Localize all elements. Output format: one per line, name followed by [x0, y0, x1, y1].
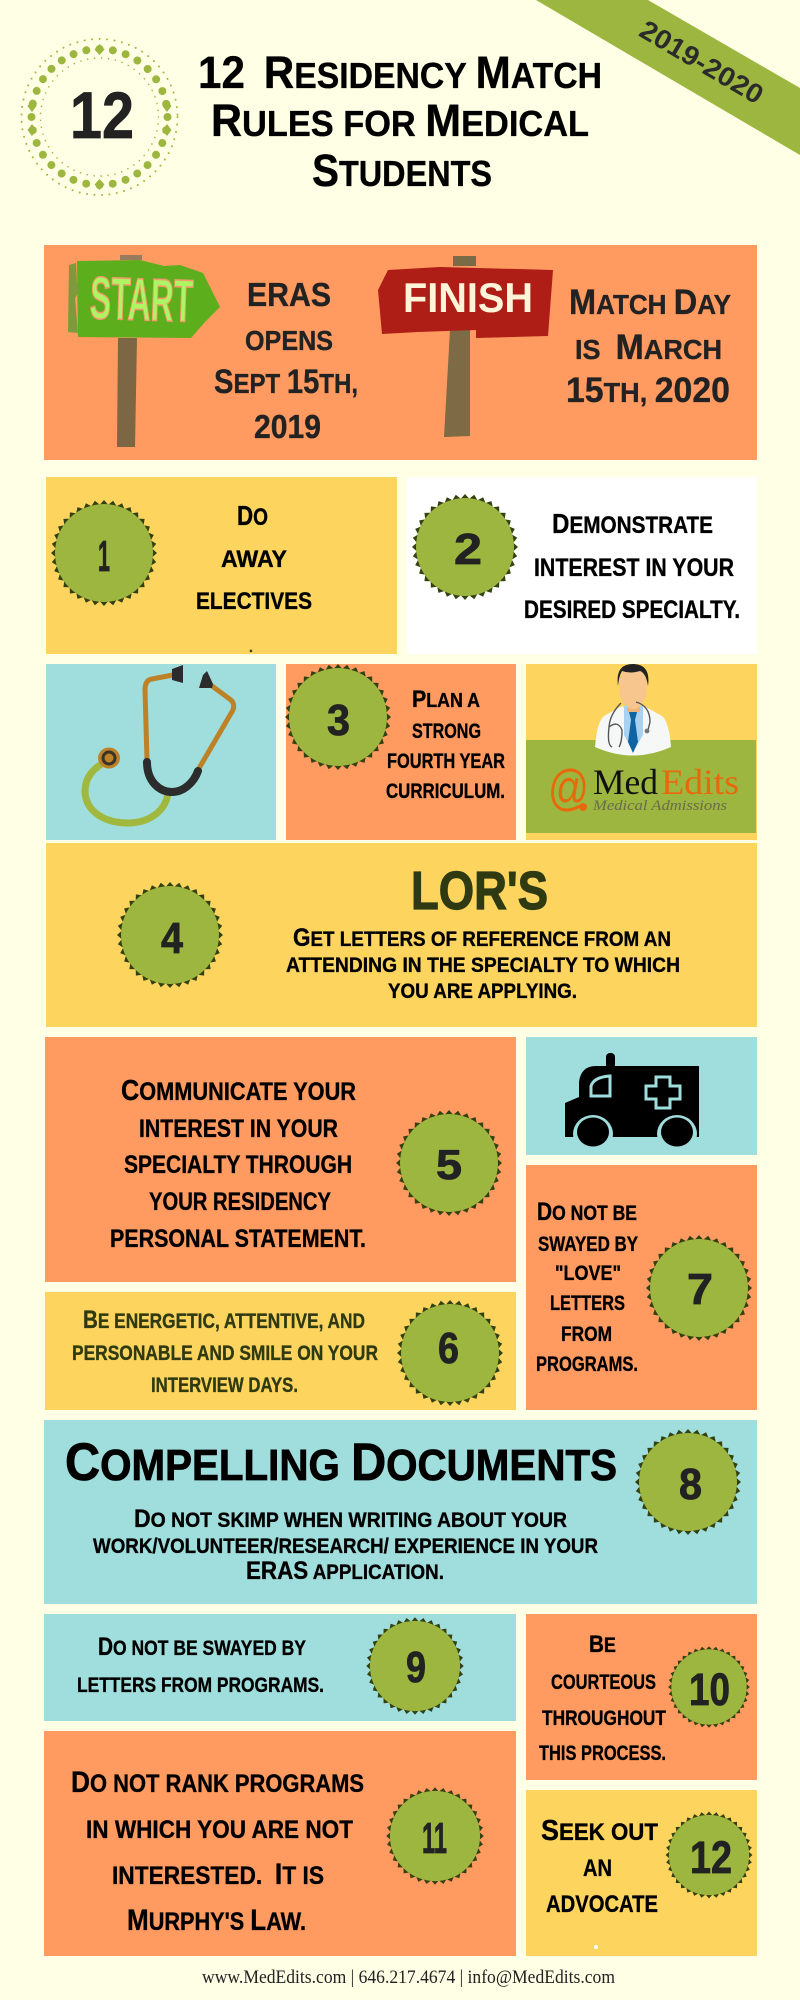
badge 4 — [117, 882, 223, 988]
logo: MedEdits: Med — [593, 762, 658, 802]
badge 6: 6 — [438, 1324, 459, 1373]
panel: rule 5 — [45, 1037, 516, 1282]
text: rule 7: SWAYED BY — [538, 1233, 638, 1256]
panel: stethoscope illustration — [46, 664, 276, 840]
panel: rule 12 — [526, 1790, 757, 1956]
panel: rule 4 LORs — [46, 843, 757, 1027]
panel: rule 7 — [526, 1165, 757, 1410]
text: rule 10 — [539, 1631, 666, 1765]
text: rule 8: WORK/VOLUNTEER/RESEARCH/ EXPERIENCE IN YOUR — [93, 1535, 598, 1558]
icon: doctor — [595, 664, 671, 756]
text: rule 7 — [536, 1198, 638, 1376]
text: rule 2 — [524, 508, 740, 624]
text: rule 5: COMMUNICATE YOUR — [121, 1075, 356, 1107]
text: match day: MATCH DAY — [569, 283, 731, 322]
text: rule 7: FROM — [561, 1323, 612, 1346]
text: rule 12: AN — [583, 1855, 612, 1882]
badge 10 — [668, 1646, 750, 1728]
text: rule 9: LETTERS FROM PROGRAMS. — [77, 1674, 324, 1697]
heading: LOR's: LOR'S — [411, 861, 548, 921]
text: rule 9 — [77, 1633, 324, 1697]
text: rule 7: LETTERS — [550, 1292, 625, 1315]
panel: rule 11 — [44, 1731, 516, 1956]
panel: rule 8 compelling documents — [44, 1420, 757, 1604]
text: rule 8: ERAS APPLICATION. — [246, 1557, 444, 1585]
icon: finish sign — [378, 256, 553, 437]
text: rule 4: YOU ARE APPLYING. — [388, 980, 577, 1003]
text: rule 11: DO NOT RANK PROGRAMS — [71, 1766, 364, 1799]
badge 5 — [396, 1110, 502, 1216]
text: rule 12: ADVOCATE — [546, 1891, 658, 1918]
text: rule 6: BE ENERGETIC, ATTENTIVE, AND — [83, 1306, 365, 1334]
text: rule 8 — [93, 1505, 598, 1585]
panel: rule 6 — [45, 1292, 516, 1410]
badge 4: 4 — [161, 914, 183, 963]
text: rule 1: AWAY — [221, 546, 287, 573]
text: rule 5: SPECIALTY THROUGH — [124, 1151, 352, 1179]
badge 8: 8 — [679, 1460, 702, 1509]
badge 7: 7 — [687, 1265, 713, 1314]
icon: start sign: START — [89, 264, 194, 335]
panel: rule 10 — [526, 1614, 757, 1780]
text: rule 5: INTEREST IN YOUR — [139, 1115, 338, 1143]
text: match day: IS MARCH — [575, 328, 722, 367]
text: ERAS opens: ERAS — [247, 276, 331, 313]
text: rule 12: SEEK OUT — [541, 1815, 658, 1847]
text: ERAS opens: 2019 — [254, 408, 321, 445]
panel: doctor and MedEdits logo — [526, 664, 757, 840]
panel: rule 3 — [285, 664, 516, 840]
text: rule 6: INTERVIEW DAYS. — [151, 1374, 298, 1397]
icon: ambulance — [565, 1053, 699, 1153]
text: rule 4: ATTENDING IN THE SPECIALTY TO WHICH — [286, 954, 680, 977]
title: STUDENTS — [312, 145, 492, 196]
text: rule 3: FOURTH YEAR — [387, 750, 505, 773]
text: ERAS opens — [214, 276, 358, 445]
text: rule 11 — [71, 1766, 364, 1937]
logo: MedEdits: Medical Admissions — [592, 798, 727, 814]
text: rule 3 — [386, 686, 505, 803]
text: ERAS opens: OPENS — [245, 325, 333, 356]
text: rule 10: COURTEOUS — [551, 1671, 656, 1694]
text: rule 11: INTERESTED. IT IS — [112, 1858, 324, 1891]
text: rule 8: DO NOT SKIMP WHEN WRITING ABOUT YOUR — [134, 1505, 567, 1533]
text: rule 11: IN WHICH YOU ARE NOT — [86, 1816, 353, 1844]
text: rule 2: INTEREST IN YOUR — [534, 554, 734, 582]
badge 9: 9 — [406, 1643, 426, 1692]
icon: start sign — [68, 255, 220, 447]
badge 9 — [366, 1617, 464, 1715]
text: rule 4: GET LETTERS OF REFERENCE FROM AN — [293, 924, 671, 952]
badge 2 — [412, 494, 518, 600]
badge 7 — [646, 1235, 752, 1341]
text: rule 6: PERSONABLE AND SMILE ON YOUR — [72, 1342, 378, 1365]
badge 1: 1 — [98, 532, 110, 581]
panel: rule 9 — [44, 1614, 516, 1721]
icon: stethoscope — [85, 665, 234, 823]
logo: MedEdits: @ — [548, 760, 589, 816]
title: RULES FOR MEDICAL — [211, 95, 589, 146]
circular 12 emblem: 12 — [70, 78, 134, 152]
text: rule 1 — [196, 500, 312, 655]
title — [198, 47, 602, 196]
text: rule 3: CURRICULUM. — [386, 780, 505, 803]
badge 11: 11 — [422, 1814, 447, 1863]
logo: MedEdits: Edits — [661, 762, 739, 802]
footer contact line: www.MedEdits.com | 646.217.4674 | info@MedEdits.com — [202, 1967, 615, 1988]
text: rule 7: PROGRAMS. — [536, 1353, 638, 1376]
badge 11 — [386, 1787, 484, 1885]
text: rule 1: DO — [237, 500, 268, 531]
panel: start and finish dates — [44, 245, 757, 460]
text: rule 3: PLAN A — [412, 686, 480, 713]
text: rule 1: ELECTIVES — [196, 588, 312, 615]
heading: compelling documents: COMPELLING DOCUMENTS — [65, 1433, 617, 1492]
text: rule 10: THIS PROCESS. — [539, 1742, 666, 1765]
text: rule 5: YOUR RESIDENCY — [149, 1188, 331, 1216]
badge 12: 12 — [690, 1832, 732, 1883]
text: match day: 15TH, 2020 — [566, 371, 730, 410]
text: rule 7: "LOVE" — [555, 1262, 621, 1285]
text: rule 2: DEMONSTRATE — [552, 508, 713, 539]
icon: finish sign: FINISH — [403, 274, 533, 321]
panel: rule 1 — [46, 477, 397, 655]
text: rule 3: STRONG — [412, 720, 481, 743]
panel: ambulance illustration — [526, 1037, 757, 1155]
text: rule 11: MURPHY'S LAW. — [127, 1904, 306, 1937]
badge 5: 5 — [436, 1141, 462, 1188]
text: ERAS opens: SEPT 15TH, — [214, 363, 358, 401]
badge 8 — [635, 1429, 741, 1535]
text: match day — [566, 283, 731, 410]
text: rule 12 — [541, 1815, 658, 1949]
badge 3: 3 — [327, 696, 350, 745]
title: 12 RESIDENCY MATCH — [198, 47, 602, 98]
badge 6 — [397, 1300, 503, 1406]
text: rule 5 — [110, 1075, 366, 1253]
circular 12 emblem — [22, 39, 178, 195]
year ribbon — [536, 0, 800, 155]
text: rule 10: THROUGHOUT — [542, 1707, 666, 1730]
text: rule 4 — [286, 924, 680, 1003]
badge 3 — [285, 664, 391, 770]
badge 10: 10 — [689, 1664, 730, 1715]
text: rule 10: BE — [589, 1631, 616, 1658]
badge 1 — [51, 500, 157, 606]
text: rule 1: . — [249, 639, 253, 655]
text: rule 6 — [72, 1306, 378, 1397]
badge 2: 2 — [454, 525, 482, 574]
text: rule 2: DESIRED SPECIALTY. — [524, 596, 740, 624]
logo: MedEdits — [548, 760, 739, 816]
text: rule 7: DO NOT BE — [537, 1198, 637, 1226]
panel: rule 2 — [407, 477, 757, 654]
year ribbon: 2019-2020 — [634, 14, 769, 110]
badge 12 — [666, 1812, 752, 1898]
text: rule 9: DO NOT BE SWAYED BY — [98, 1633, 306, 1661]
text: rule 5: PERSONAL STATEMENT. — [110, 1225, 366, 1253]
